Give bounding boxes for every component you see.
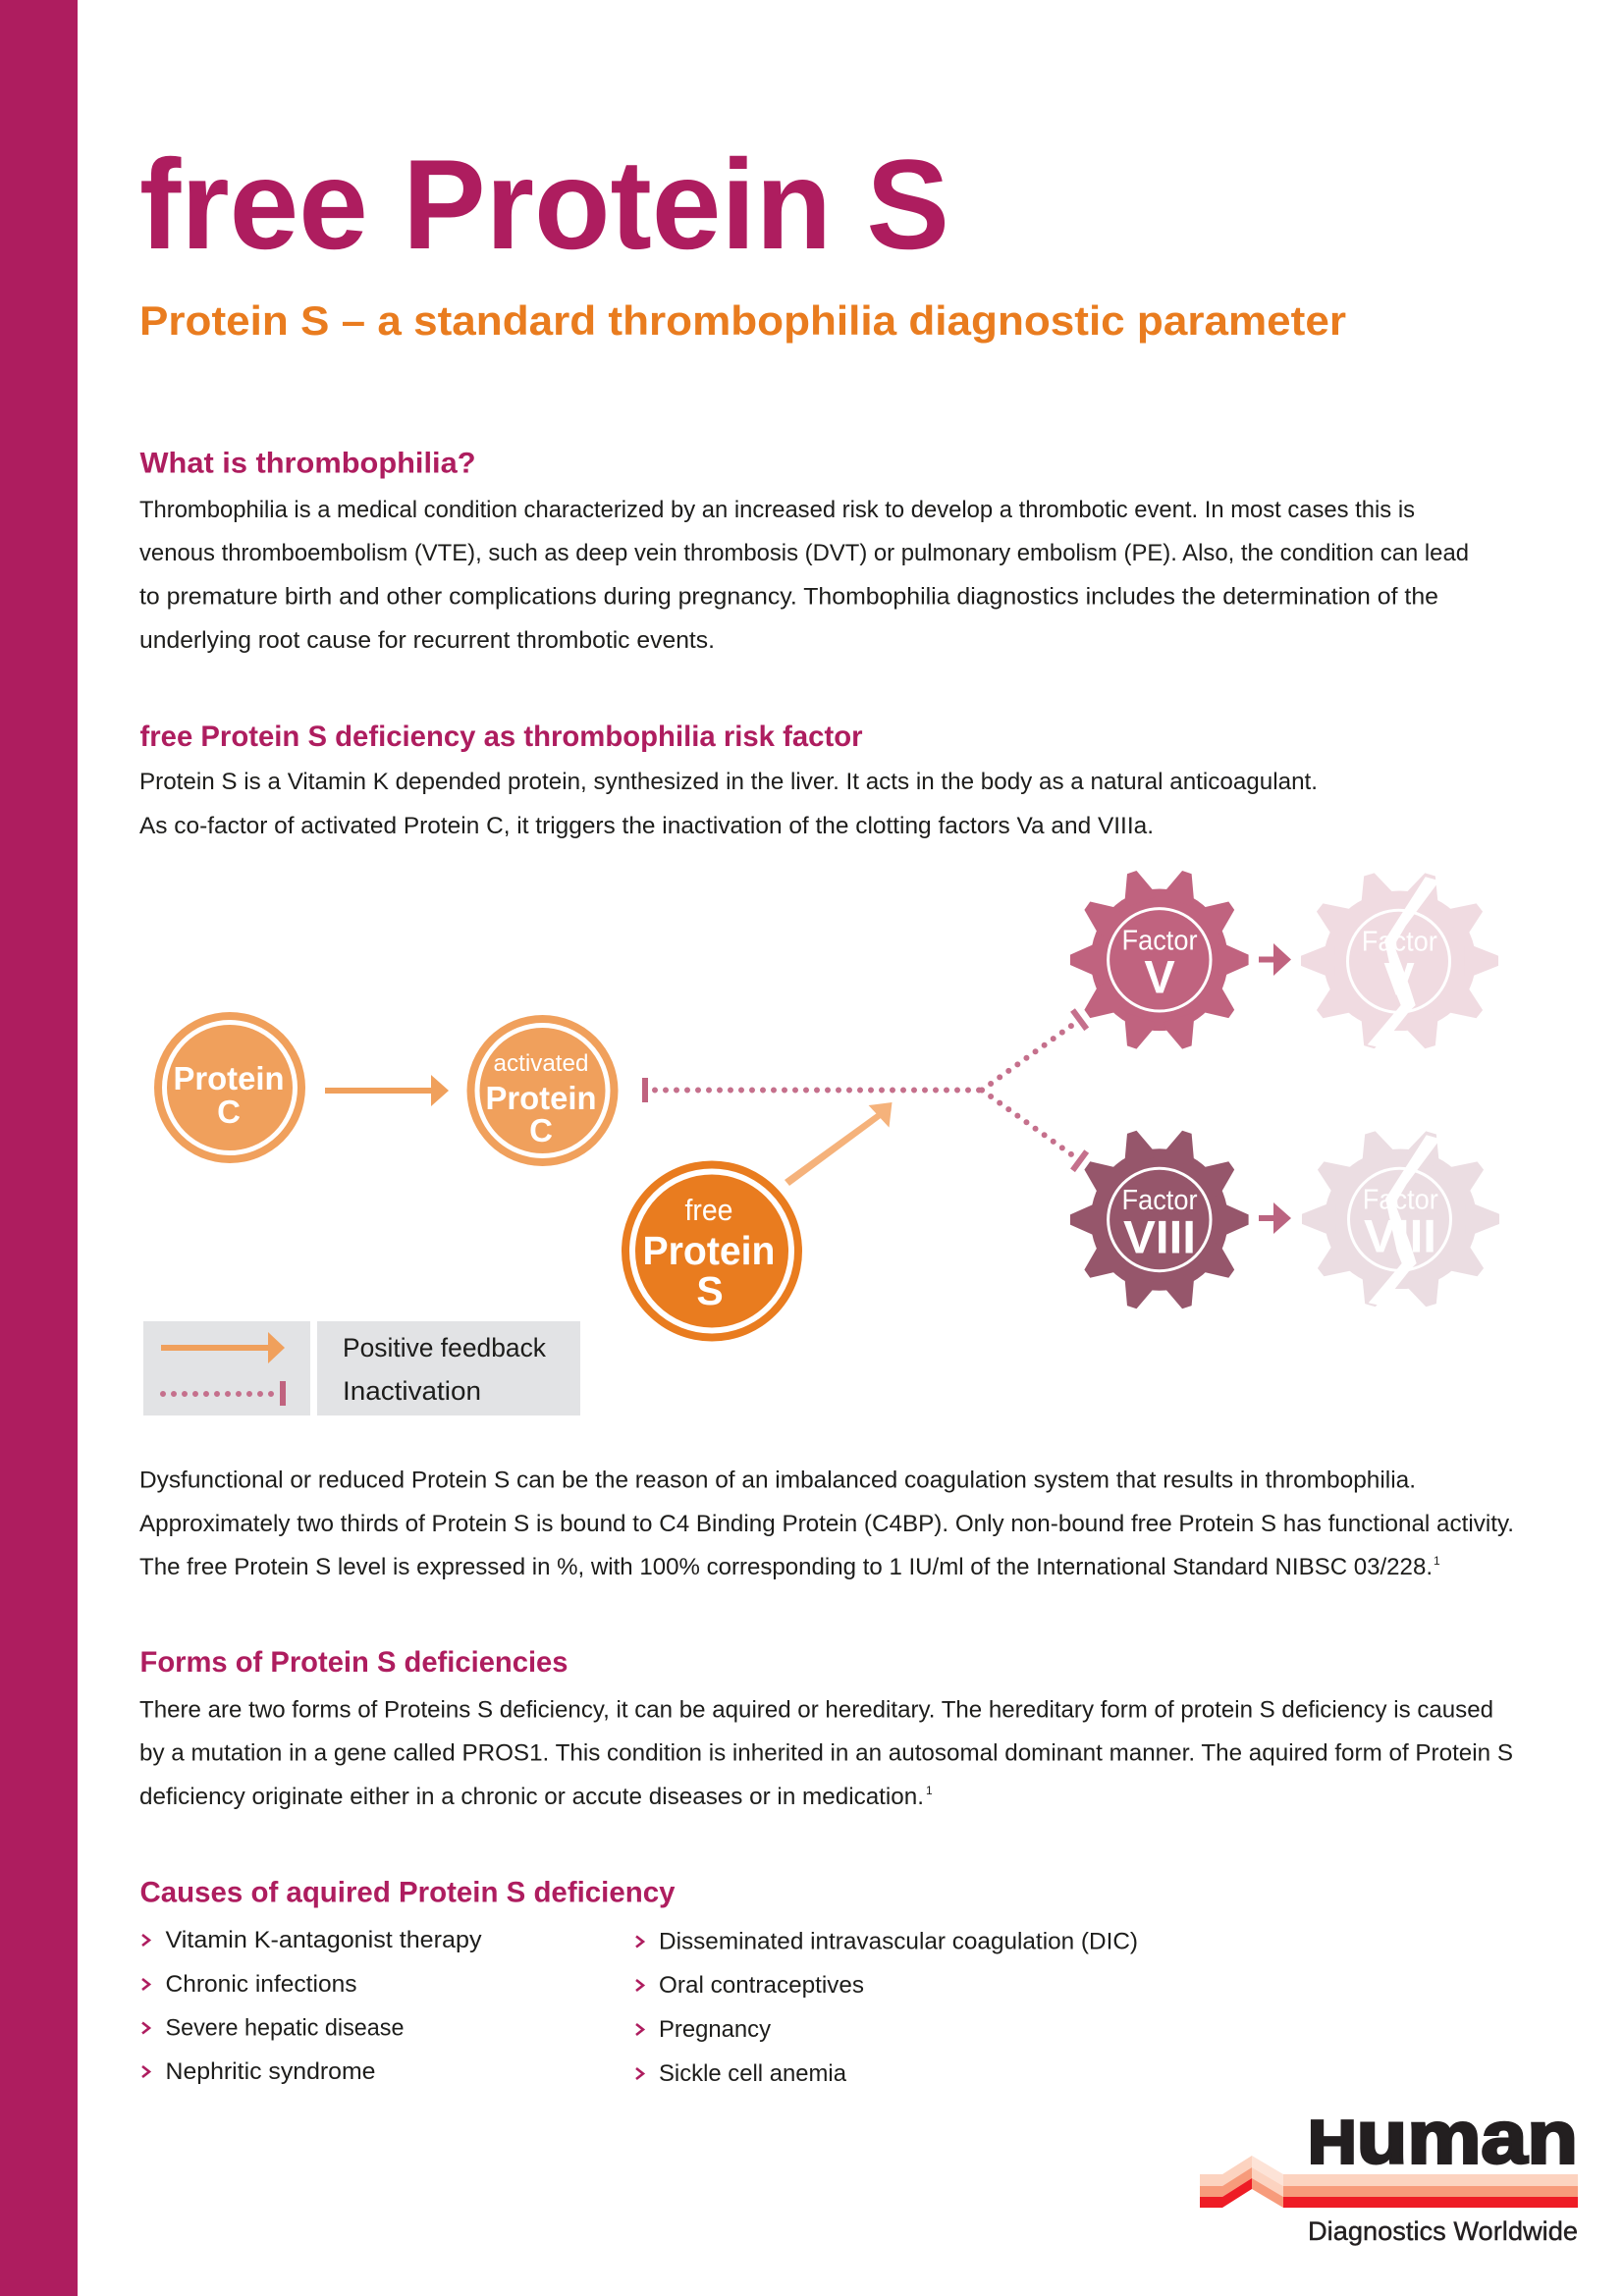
right list: Disseminated intravascular coagulation (DIC) xyxy=(659,1928,1138,1955)
logo tagline: Diagnostics Worldwide xyxy=(1308,2216,1578,2246)
activated Protein C circle: activated xyxy=(493,1050,589,1077)
Protein C circle: Protein xyxy=(173,1060,285,1096)
diagram: coagulation pathway xyxy=(154,868,1499,1341)
section: free Protein S deficiency xyxy=(139,721,1318,839)
gear: Factor VIII inactivated: Factor xyxy=(1363,1184,1438,1215)
legend xyxy=(143,1321,580,1415)
right list xyxy=(636,1928,1138,2087)
activated Protein C circle xyxy=(467,1015,619,1166)
gear: Factor VIII: Factor xyxy=(1121,1185,1198,1216)
right list: Oral contraceptives xyxy=(659,1972,864,1999)
heading: Forms of Protein S deficiencies xyxy=(139,1646,568,1679)
gear: Factor V: V xyxy=(1144,951,1175,1003)
legend label: inactivation: Inactivation xyxy=(343,1376,481,1406)
subtitle: Protein S – a standard thrombophilia diagnostic parameter xyxy=(139,297,1346,344)
left list: Severe hepatic disease xyxy=(165,2014,405,2042)
logo wordmark: Human xyxy=(1308,2097,1578,2179)
body text: Protein S is a Vitamin K depended protein, synthesized in the liver. It acts in the body as a natural anticoagulant. xyxy=(139,769,1318,795)
body text: to premature birth and other complications during pregnancy. Thombophilia diagnostics includes the determination of the xyxy=(139,583,1438,611)
gear: Factor VIII inactivated: VIII xyxy=(1364,1209,1436,1262)
right list: Pregnancy xyxy=(659,2016,771,2043)
gear: Factor VIII inactivated xyxy=(1302,1128,1499,1309)
free Protein S circle: Protein xyxy=(642,1228,776,1273)
arrow: Factor VIII to inactive xyxy=(1259,1202,1291,1234)
section: forms of deficiencies xyxy=(139,1646,1513,1810)
body text: deficiency originate either in a chronic or accute diseases or in medication. xyxy=(139,1784,924,1810)
gear: Factor VIII xyxy=(1070,1128,1249,1311)
logo bands xyxy=(1200,2156,1578,2208)
Protein C circle: C xyxy=(217,1094,241,1130)
legend label: positive feedback: Positive feedback xyxy=(343,1333,546,1362)
arrow: Factor V to inactive xyxy=(1259,943,1291,976)
arrow: Protein C to activated Protein C xyxy=(325,1075,449,1106)
body text: venous thromboembolism (VTE), such as deep vein thrombosis (DVT) or pulmonary embolism (PE). Also, the condition can lead xyxy=(139,540,1469,566)
paragraph: dysfunctional Protein S xyxy=(139,1467,1514,1580)
paragraph: dysfunctional Protein S: The free Protein S level is expressed in %, with 100% corresponding to 1 IU/ml of the International Standard NIBSC 03/228. xyxy=(139,1554,1433,1580)
paragraph: dysfunctional Protein S: 1 xyxy=(1434,1554,1440,1568)
body text: 1 xyxy=(926,1784,933,1797)
activated Protein C circle: C xyxy=(529,1112,553,1148)
title: free Protein S xyxy=(139,133,949,276)
free Protein S circle xyxy=(622,1160,802,1341)
gear: Factor V inactivated xyxy=(1301,870,1498,1051)
left list: Nephritic syndrome xyxy=(165,2058,375,2085)
paragraph: dysfunctional Protein S: Approximately two thirds of Protein S is bound to C4 Binding Protein (C4BP). Only non-bound free Protein S has functional activity. xyxy=(139,1511,1514,1537)
gear: Factor V xyxy=(1070,868,1249,1052)
activated Protein C circle: Protein xyxy=(485,1080,597,1116)
left list: Vitamin K-antagonist therapy xyxy=(165,1927,481,1953)
body text xyxy=(139,769,1318,839)
legend inactivation symbol xyxy=(163,1381,286,1406)
section: what is thrombophilia xyxy=(139,448,1469,654)
body text: Thrombophilia is a medical condition characterized by an increased risk to develop a thrombotic event. In most cases this is xyxy=(139,497,1415,523)
legend labels panel xyxy=(317,1321,580,1415)
free Protein S circle: S xyxy=(696,1268,724,1313)
heading: free Protein S deficiency as thrombophilia risk factor xyxy=(139,721,863,753)
Protein C circle xyxy=(154,1012,305,1163)
body text xyxy=(139,497,1469,654)
left list xyxy=(142,1927,481,2085)
gear: Factor VIII: VIII xyxy=(1123,1211,1196,1262)
legend arrow xyxy=(161,1332,285,1363)
heading: What is thrombophilia? xyxy=(139,448,475,479)
body text: by a mutation in a gene called PROS1. This condition is inherited in an autosomal dominant manner. The aquired form of Protein S xyxy=(139,1739,1513,1767)
gear: Factor V inactivated: Factor xyxy=(1362,926,1437,957)
body text xyxy=(139,1696,1513,1810)
paragraph: dysfunctional Protein S: Dysfunctional or reduced Protein S can be the reason of an imbalanced coagulation system that results in thrombophilia. xyxy=(139,1467,1416,1494)
body text: As co-factor of activated Protein C, it triggers the inactivation of the clotting factors Va and VIIIa. xyxy=(139,813,1154,839)
logo: Human Diagnostics Worldwide xyxy=(1200,2097,1578,2246)
gear: Factor V: Factor xyxy=(1121,925,1198,956)
right list: Sickle cell anemia xyxy=(659,2060,847,2087)
legend symbols panel xyxy=(143,1321,310,1415)
arrow: free Protein S to inactivation line xyxy=(785,1102,892,1186)
sidebar xyxy=(0,0,78,2296)
free Protein S circle: free xyxy=(685,1193,732,1227)
heading: Causes of aquired Protein S deficiency xyxy=(139,1877,676,1908)
inactivation line xyxy=(642,1010,1087,1170)
section: causes xyxy=(139,1877,1138,2087)
gear: Factor V inactivated: V xyxy=(1383,952,1415,1004)
left list: Chronic infections xyxy=(165,1971,357,1998)
body text: underlying root cause for recurrent thrombotic events. xyxy=(139,627,715,654)
body text: There are two forms of Proteins S deficiency, it can be aquired or hereditary. The hereditary form of protein S deficiency is caused xyxy=(139,1696,1493,1724)
